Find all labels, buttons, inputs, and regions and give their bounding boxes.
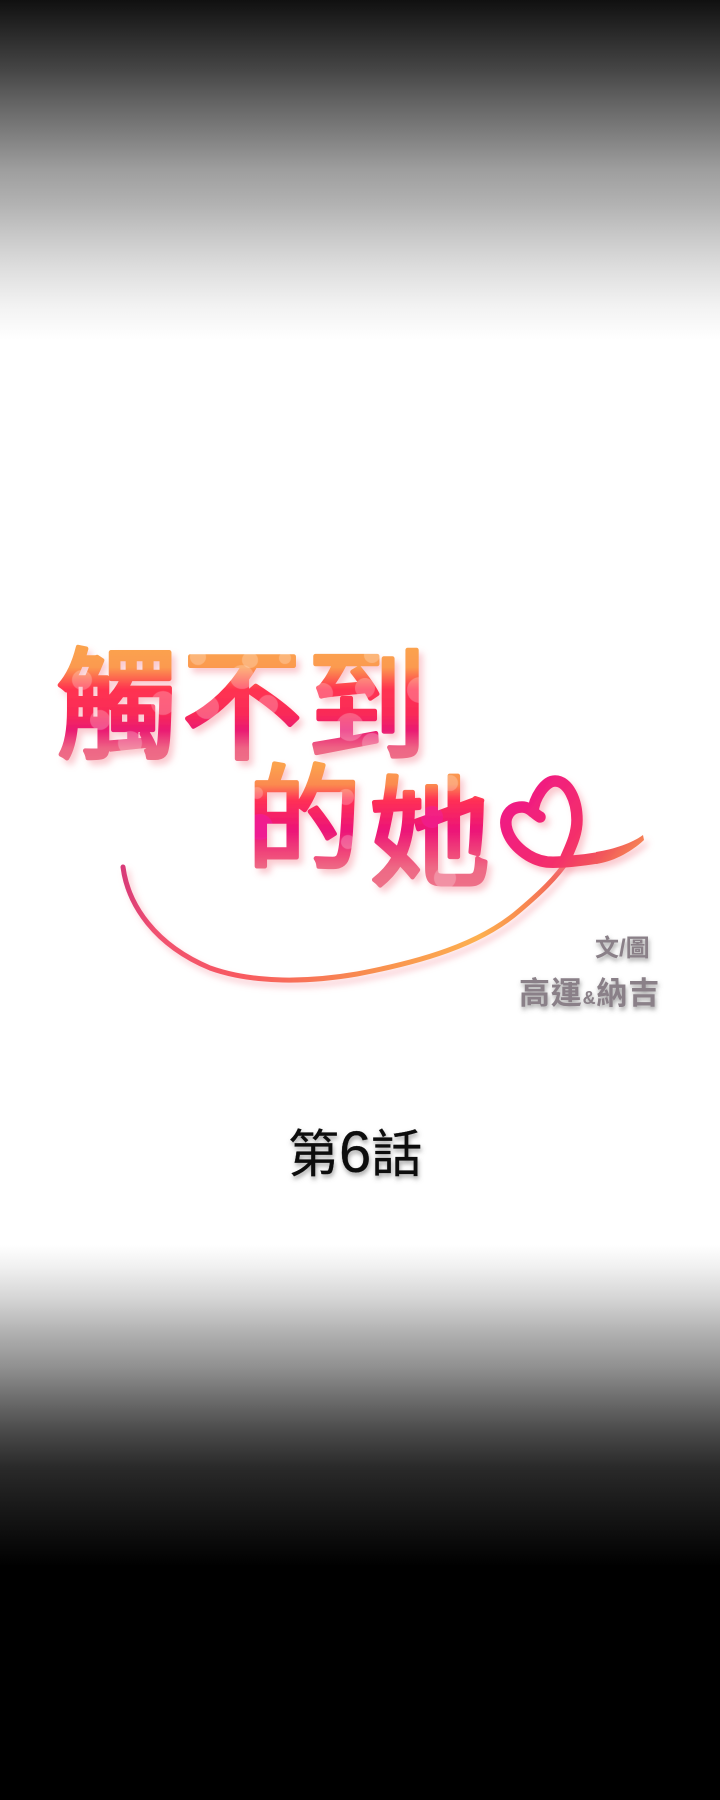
title: 觸不到的她 <box>57 640 490 902</box>
chapter heading: 第6話: 第6話 <box>288 1120 422 1185</box>
title line 1: 觸不到 <box>57 640 427 775</box>
credit label: 文/圖: 文/圖 <box>595 934 650 962</box>
title line 1: 觸不到: 觸 <box>57 640 177 774</box>
icon: heart with tail <box>506 781 644 864</box>
top dark gradient band <box>0 0 720 340</box>
title line 1: 觸不到: 到 <box>307 641 427 775</box>
title line 2: 的她: 的 <box>247 758 361 885</box>
credit names: 高運&amp;納吉: 高運&納吉 <box>519 976 660 1011</box>
swoosh ribbon <box>123 860 568 980</box>
title line 2: 的她: 她 <box>370 768 490 902</box>
title line 2: 的她 <box>247 758 490 902</box>
title line 1: 觸不到: 不 <box>182 641 302 775</box>
bottom dark gradient band <box>0 1245 720 1800</box>
